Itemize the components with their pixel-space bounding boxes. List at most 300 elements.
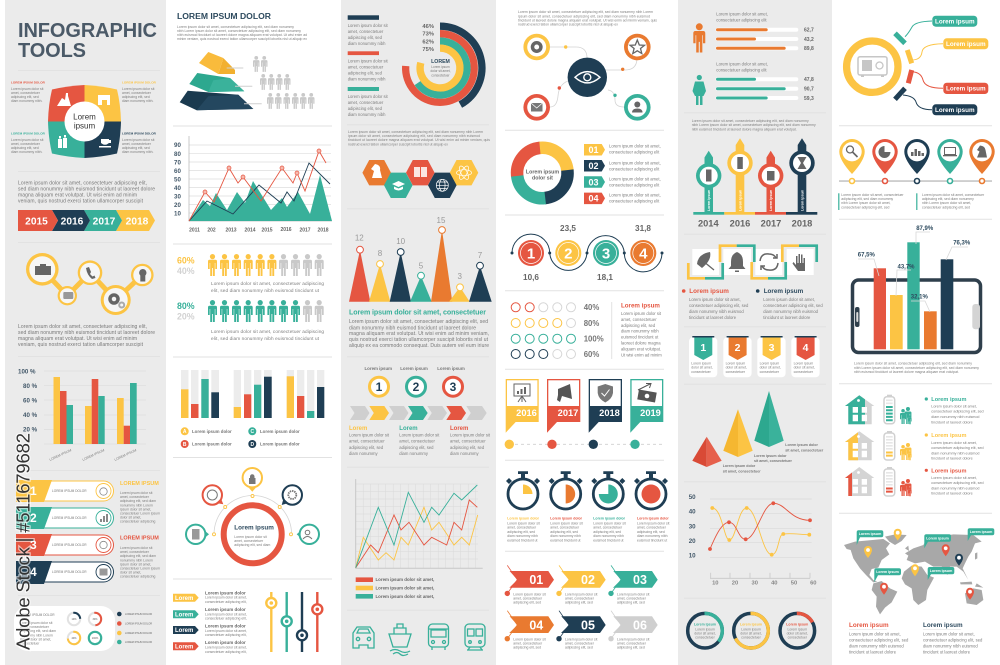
- year flags: [506, 379, 663, 433]
- numbered tags: Lorem ipsum dolor sit amet,: [609, 160, 661, 165]
- winding number circles: 18,1: [597, 273, 613, 282]
- arrow 02: Lorem ipsum dolor sit: [565, 592, 597, 596]
- text block: Lorem ipsum dolor sit amet, consectetuer adipiscing elit,: [18, 324, 147, 330]
- card 2: consectetuer: [726, 370, 746, 374]
- bar chart: LOREM IPSUM: [82, 448, 105, 462]
- numbered tags: Lorem ipsum dolor sit amet,: [609, 143, 661, 148]
- icon: cup: [99, 139, 111, 148]
- radial bar chart: 75%: [422, 47, 434, 53]
- icon: eye: [575, 72, 600, 83]
- three donuts: consectetuer: [788, 636, 808, 640]
- numbered tags: consectetuer adipiscing elit: [609, 182, 660, 187]
- step text: diam nonummy: [349, 451, 379, 456]
- stopwatches: adipiscing elit, sed: [637, 530, 665, 534]
- label bottom right: diam nonummy nibh.: [122, 150, 154, 154]
- icon: shop: [98, 95, 110, 105]
- phone bar chart: 76,3%: [953, 241, 971, 247]
- card with small donuts: consectetuer: [20, 642, 40, 646]
- arrow 04: [505, 611, 554, 650]
- label bottom right: Lorem ipsum dolor sit: [122, 138, 154, 142]
- grouped bars: [181, 370, 324, 418]
- arrow 01: Lorem ipsum dolor sit: [513, 592, 546, 596]
- text block: [692, 119, 816, 131]
- legend bars with text: amet, consectetuer: [348, 29, 384, 34]
- circular four-part diagram: Lorem: [73, 112, 96, 121]
- stopwatches: Lorem ipsum dolor sit: [550, 522, 583, 526]
- stopwatches: amet, consectetuer: [637, 526, 667, 530]
- family teal: [900, 407, 912, 424]
- card 3: dolor sit amet,: [760, 366, 781, 370]
- icon: car: [353, 627, 374, 648]
- numbered circles: 3: [450, 380, 457, 394]
- two-column text: diam nonummy nibh euismod: [689, 309, 744, 314]
- small legend: LOREM IPSUM DOLOR: [125, 622, 152, 626]
- triangle value chart: 8: [378, 249, 383, 258]
- arrow 01: 01: [529, 573, 543, 587]
- card with small donuts: 30%: [92, 618, 98, 621]
- triangle value chart: 3: [457, 272, 462, 281]
- card with small donuts: adipiscing elit, sed diam: [20, 629, 56, 633]
- curve line chart: 20: [732, 580, 738, 586]
- two-column text: consectetuer adipiscing elit, sed: [763, 303, 823, 308]
- eye network: [523, 34, 651, 121]
- side text 2: consectetuer Lorem ipsum: [120, 566, 160, 570]
- side text 2: ipsum dolor sit amet,: [120, 562, 151, 566]
- pictogram 80 percent: [177, 300, 324, 341]
- panel: column 3 background: [341, 0, 496, 665]
- gender bars male: 62,7: [804, 28, 814, 34]
- bar chart: 40 %: [23, 412, 38, 419]
- card with small donuts: [14, 606, 115, 651]
- stopwatches: euismod tincidunt ut: [507, 538, 538, 542]
- timeline dots: [505, 440, 665, 449]
- bar chart: 20 %: [23, 426, 38, 434]
- label top left: adipiscing elit, sed: [11, 95, 39, 99]
- stopwatches: Lorem ipsum dolor sit: [507, 522, 540, 526]
- text block: Lorem ipsum dolor sit amet, consectetuer adipiscing elit,: [18, 180, 147, 186]
- line chart with mountains: 10: [174, 210, 181, 217]
- small legend: [117, 612, 152, 644]
- tag list: Lorem: [175, 644, 193, 650]
- segmented donut: dolor sit: [532, 176, 553, 182]
- pictogram 60 percent: 40%: [177, 266, 195, 276]
- bottom left text: tincidunt ut laoreet dolore: [849, 650, 897, 654]
- arrow 03: 03: [633, 573, 647, 587]
- step text: [349, 426, 491, 456]
- pin: magnifier: [839, 139, 865, 184]
- label bottom left: diam nonummy nibh.: [11, 150, 43, 154]
- label bottom right: amet, consectetuer: [122, 142, 152, 146]
- tag list: Lorem ipsum dolor: [205, 607, 246, 612]
- stopwatches: adipiscing elit, sed: [593, 530, 621, 534]
- paragraph: [349, 319, 489, 349]
- card 1: consectetuer: [691, 370, 712, 374]
- label top left: Lorem ipsum dolor sit: [11, 87, 43, 91]
- text block: magna aliquam erat volutpat. Ut wisi enim ad minim: [18, 192, 137, 198]
- house rows: [845, 395, 984, 496]
- numbered banner list: LOREM IPSUM DOLOR: [52, 516, 87, 520]
- icon: knight: [371, 164, 382, 178]
- winding number circles: 31,8: [635, 224, 651, 233]
- curve line chart: [689, 494, 817, 586]
- label top left: diam nonummy nibh.: [11, 99, 43, 103]
- year arrow banner: 2016: [61, 216, 84, 227]
- winding number circles: 2: [564, 246, 572, 262]
- dot rating rows: [511, 303, 604, 359]
- stopwatches: Lorem ipsum dolor: [550, 517, 583, 521]
- icon: bus: [428, 624, 448, 650]
- node: gear: [523, 34, 550, 60]
- world map: Lorem ipsum: [859, 532, 881, 536]
- label top left: LOREM IPSUM DOLOR: [11, 80, 46, 84]
- gender bars female: consectetuer adipiscing elit: [716, 68, 767, 72]
- three donuts: Lorem ipsum: [741, 628, 761, 632]
- map pins on line: [839, 139, 995, 184]
- flag 2016: [506, 379, 539, 433]
- numbered banner list: LOREM IPSUM DOLOR: [52, 543, 87, 547]
- tag list: Lorem ipsum dolor: [205, 590, 246, 595]
- label bottom right: adipiscing elit, sed: [122, 146, 150, 150]
- icon: hand: [792, 254, 805, 271]
- pictogram 80 percent: Lorem ipsum dolor sit amet, consectetuer adipiscing: [211, 329, 324, 334]
- intro text: nibh euismod tincidunt ut laoreet dolore magna aliquam erat volutpat. Ut wisi enim ad: [177, 33, 307, 37]
- text block: magna aliquam erat volutpat. Ut wisi enim ad minim: [18, 336, 137, 342]
- text block: ipsum dolor sit amet, consectetuer adipiscing elit, sed diam nonummy nibh euismod: [348, 134, 480, 138]
- arrow 04: 04: [529, 618, 543, 632]
- two-column text: Lorem ipsum dolor sit amet,: [689, 297, 741, 302]
- tag list: Lorem ipsum dolor sit amet,: [205, 646, 247, 650]
- intro text column 4: Lorem ipsum dolor sit amet, consectetuer adipiscing elit, sed diam nonummy nibh Lorem: [518, 10, 653, 14]
- transport icons: [353, 624, 485, 656]
- family yellow: [900, 443, 912, 460]
- text block: tincidunt ut laoreet dolore magna aliquam erat volutpat. Ut wisi enim ad minim veniam, quis: [348, 138, 490, 142]
- card with small donuts: LOREM IPSUM DOLOR: [20, 613, 55, 617]
- house text 2: diam nonummy nibh euismod: [931, 451, 979, 455]
- three donuts: dolor sit amet,: [694, 632, 716, 636]
- flag 2019: [630, 379, 663, 433]
- radial bar chart: Lorem ipsum: [431, 65, 450, 69]
- numbered tags: consectetuer adipiscing elit: [609, 166, 660, 171]
- legend A B C D: Lorem ipsum dolor: [260, 442, 300, 446]
- numbered circles: Lorem ipsum: [400, 366, 428, 371]
- side text 2: dolor sit amet,: [120, 571, 141, 575]
- gender bars male: 43,2: [804, 37, 814, 43]
- label top right: diam nonummy nibh.: [122, 99, 154, 103]
- hexagon cluster: [362, 160, 478, 198]
- icon: globe: [436, 179, 448, 191]
- arrow 01: amet, consectetuer: [513, 596, 543, 600]
- arrow towers: 2017: [761, 219, 781, 229]
- step text: amet, consectetuer: [349, 439, 385, 444]
- arrow 05: [556, 611, 606, 650]
- legend A B C D: Lorem ipsum dolor: [260, 429, 300, 434]
- step text: diam nonummy: [399, 451, 429, 456]
- step text: adipiscing elit, sed: [399, 445, 434, 450]
- intro text: Lorem ipsum dolor sit amet, consectetuer adipiscing elit, sed diam nonummy: [177, 25, 294, 29]
- line chart with mountains: 90: [174, 142, 181, 149]
- curve line chart: 20: [689, 538, 696, 545]
- numbered banner list: [16, 480, 114, 584]
- numbered circles: [365, 366, 465, 396]
- gender bars female: Lorem ipsum dolor sit amet,: [716, 62, 768, 66]
- bottom right text: [923, 622, 983, 654]
- side text 1: dolor sit amet,: [120, 516, 141, 520]
- teal heading: Lorem ipsum dolor sit amet, consectetuer: [349, 308, 486, 316]
- text block: [18, 180, 155, 204]
- pin: laptop: [937, 139, 963, 184]
- text block: sed diam nonummy nibh euismod tincidunt ut laoreet dolore: [18, 330, 155, 336]
- intro text column 4: nostrud exerci tation ullamcorper suscipit lobortis nisl ut aliquip ex: [518, 22, 618, 26]
- gender bars male: 89,8: [804, 46, 814, 52]
- winding number circles: 23,5: [560, 224, 576, 233]
- triangle value chart: 5: [419, 262, 424, 270]
- card 1: dolor sit amet,: [691, 366, 713, 370]
- rating text: euismod tincidunt ut: [621, 335, 659, 340]
- grid line chart: [356, 479, 483, 568]
- three donuts: consectetuer: [695, 636, 716, 640]
- card 4: 4: [803, 342, 809, 354]
- arrow 02: [556, 565, 606, 605]
- curve line chart: 10: [689, 553, 696, 560]
- curve line chart: 50: [791, 580, 797, 586]
- tower 2018: Lorem ipsum: [800, 190, 804, 211]
- safe ring with callouts: Lorem ipsum: [946, 41, 986, 48]
- step text: Lorem ipsum dolor sit: [450, 433, 491, 438]
- line chart with mountains: 2018: [317, 228, 329, 234]
- legend A B C D: [181, 427, 300, 448]
- bar chart: 80 %: [23, 383, 38, 390]
- house text 3: tincidunt ut laoreet dolore: [931, 492, 973, 496]
- arrow 03: [608, 565, 658, 605]
- stopwatches: Lorem ipsum dolor sit: [593, 522, 626, 526]
- legend A B C D: Lorem ipsum dolor: [192, 429, 232, 434]
- arrow 06: amet, consectetuer: [617, 642, 647, 646]
- two-column text: [682, 288, 823, 320]
- tag list: Lorem ipsum dolor sit amet,: [205, 596, 247, 600]
- numbered circles: 2: [413, 380, 420, 394]
- segmented donut: Lorem ipsum: [526, 170, 559, 176]
- phone bar chart: [852, 226, 980, 352]
- flag 2017: [547, 379, 580, 433]
- icon: atom: [456, 165, 472, 181]
- rating text: laoreet dolore magna: [621, 340, 661, 346]
- arrow 04: Lorem ipsum dolor sit: [513, 637, 546, 641]
- card 1: Lorem ipsum: [691, 362, 711, 366]
- icon: refresh arrows: [760, 254, 778, 270]
- legend bars with text: [348, 15, 389, 117]
- icon: book: [414, 167, 427, 177]
- house teal: [845, 395, 874, 424]
- legend bars with text: Lorem ipsum dolor sit: [348, 59, 389, 64]
- stopwatches: amet, consectetuer: [593, 526, 623, 530]
- three donuts: Lorem ipsum: [740, 622, 762, 626]
- bottom left text: consectetuer adipiscing elit, sed: [849, 638, 909, 642]
- side text 2: [120, 535, 160, 579]
- arrow 06: [608, 611, 658, 650]
- house text 1: consectetuer adipiscing elit, sed: [931, 410, 984, 414]
- bottom right text: tincidunt ut laoreet dolore: [923, 650, 971, 654]
- side text 1: nonummy nibh Lorem: [120, 503, 153, 507]
- line chart with mountains: [174, 136, 332, 234]
- radial bar chart: 73%: [422, 32, 434, 38]
- stopwatches: diam nonummy nibh: [637, 534, 668, 538]
- stopwatch 1: [506, 471, 540, 509]
- title: INFOGRAPHIC: [18, 20, 157, 42]
- card with small donuts: amet, consectetuer: [20, 625, 50, 629]
- radial diagram with pins: Lorem ipsum: [234, 524, 274, 532]
- numbered tags: Lorem ipsum dolor sit amet,: [609, 176, 661, 181]
- triangle value chart: 10: [396, 237, 406, 246]
- safe ring with callouts: Lorem ipsum: [935, 107, 975, 114]
- three donuts: consectetuer: [741, 636, 762, 640]
- text block: Lorem ipsum dolor sit amet, consectetuer adipiscing elit, sed diam nonummy nibh Lorem: [348, 130, 483, 134]
- flag 2017: 2017: [558, 408, 578, 418]
- chain of circles with icons: [26, 253, 154, 315]
- text block: veniam, quis nostrud exerci tation ullamcorper suscipit: [18, 198, 144, 204]
- side text 2: nonummy nibh Lorem: [120, 558, 153, 562]
- two-column text: tincidunt ut laoreet dolore: [763, 315, 811, 320]
- stopwatch 3: [591, 471, 625, 509]
- tag list: [173, 590, 247, 654]
- small legend: LOREM IPSUM DOLOR: [125, 641, 152, 644]
- card with small donuts: 100%: [92, 637, 99, 640]
- label top right: amet, consectetuer: [122, 91, 152, 95]
- winding number circles: [510, 224, 664, 282]
- card 2: dolor sit amet,: [726, 366, 747, 370]
- house text 3: Lorem ipsum dolor sit amet,: [931, 476, 977, 480]
- arrow towers: 2014: [698, 219, 719, 229]
- house text 1: diam nonummy nibh euismod: [931, 415, 979, 419]
- stopwatches: euismod tincidunt ut: [593, 538, 624, 542]
- label bottom left: [11, 132, 46, 154]
- text block: nibh Lorem ipsum dolor sit amet, consectetuer adipiscing elit, sed diam nonummy: [854, 366, 979, 370]
- house text 2: [925, 433, 984, 461]
- dot rating rows: 60%: [584, 350, 599, 359]
- three donuts: Lorem ipsum: [694, 622, 716, 626]
- bottom left text: diam nonummy nibh euismod: [849, 644, 904, 648]
- bottom left text: Lorem ipsum: [849, 622, 889, 629]
- triangle value chart: 7: [478, 251, 483, 260]
- triangle value chart: [349, 216, 492, 302]
- intro text: minim veniam, quis nostrud exerci tation ullamcorper suscipit lobortis nisl ut aliquip ex: [177, 37, 307, 41]
- stopwatches: diam nonummy nibh: [593, 534, 624, 538]
- phone bar chart: 43,7%: [897, 265, 915, 271]
- world map: Lorem ipsum: [926, 536, 949, 540]
- step text: amet, consectetuer: [450, 439, 486, 444]
- numbered banner list: 4: [30, 565, 37, 579]
- tag list: Lorem: [175, 612, 193, 618]
- triangle value chart: 12: [355, 234, 364, 242]
- label top left: amet, consectetuer: [11, 91, 41, 95]
- radial bar chart: [406, 24, 482, 105]
- flag 2019: 2019: [640, 408, 661, 418]
- tag list: Lorem ipsum dolor sit amet,: [205, 629, 247, 633]
- tag list: Lorem: [175, 596, 193, 602]
- rating text: adipiscing elit, sed: [621, 323, 656, 328]
- icon: people: [58, 135, 67, 148]
- year arrow banner: 2018: [126, 216, 149, 227]
- stopwatches: adipiscing elit, sed: [507, 530, 535, 534]
- icon: safe: [858, 57, 887, 77]
- circular four-part diagram: ipsum: [74, 122, 96, 131]
- side text 2: amet, consectetuer: [120, 550, 150, 554]
- numbered tags: consectetuer adipiscing elit: [609, 149, 660, 154]
- tag list: Lorem ipsum dolor: [205, 640, 246, 645]
- line chart with mountains: 40: [174, 185, 181, 192]
- numbered circles: Lorem ipsum: [365, 366, 392, 371]
- tower 2014: Lorem ipsum: [707, 190, 711, 211]
- gender bars female: 59,3: [804, 96, 814, 102]
- gender bars female: 47,8: [804, 77, 814, 83]
- stopwatches: [506, 471, 669, 542]
- house text 2: Lorem ipsum dolor sit amet,: [931, 441, 977, 445]
- legend A B C D: A: [183, 429, 187, 435]
- paragraph: diam nonummy nibh euismod tincidunt ut laoreet dolore: [349, 325, 476, 331]
- flag 2018: 2018: [599, 408, 620, 418]
- heading column 2: LOREM IPSUM DOLOR: [177, 11, 272, 21]
- 3D pyramids: Lorem ipsum dolor: [723, 464, 756, 468]
- step text: adipiscing elit, sed: [450, 445, 485, 450]
- pictogram 60 percent: Lorem ipsum dolor sit amet, consectetuer adipiscing: [211, 281, 324, 286]
- house text 3: Lorem ipsum: [931, 468, 966, 474]
- card 4: dolor sit amet,: [794, 366, 815, 370]
- arrow 06: adipiscing elit, sed: [617, 646, 645, 650]
- line chart with mountains: 60: [174, 168, 181, 175]
- year arrow banner: 2017: [93, 216, 116, 227]
- radial bar chart: LOREM: [431, 59, 450, 65]
- node: star: [624, 34, 651, 60]
- chart legend: Lorem ipsum dolor sit amet,: [376, 586, 434, 590]
- text block: Lorem ipsum dolor sit amet, consectetuer adipiscing elit, sed diam nonummy: [692, 119, 809, 123]
- tag list: consectetuer adipiscing elit,: [205, 633, 247, 637]
- numbered banner list: 1: [30, 484, 37, 498]
- card 4: [791, 336, 820, 377]
- three donuts: dolor sit amet,: [740, 632, 762, 636]
- stopwatches: euismod tincidunt ut: [637, 538, 667, 542]
- gender bars female: [692, 62, 814, 105]
- intro text: nibh Lorem ipsum dolor sit amet, consectetuer adipiscing elit, sed diam nonummy: [177, 29, 301, 33]
- radial bar chart: 46%: [422, 24, 434, 30]
- legend bars with text: adipiscing elit, sed: [348, 35, 383, 40]
- intro text column 4: tincidunt ut laoreet dolore magna aliquam erat volutpat. Ut wisi enim ad minim veniam, quis: [518, 18, 657, 22]
- line chart with mountains: 2013: [225, 228, 237, 234]
- gender bars male: Lorem ipsum dolor sit amet,: [716, 12, 768, 16]
- gender bars male: [693, 12, 814, 53]
- card 3: consectetuer: [760, 370, 780, 374]
- paragraph: quis nostrud exerci tation ullamcorper suscipit lobortis nisl ut: [349, 337, 489, 343]
- pin: left lower: [186, 525, 209, 544]
- house text 1: [925, 397, 984, 424]
- intro text: [177, 25, 307, 41]
- step text: amet, consectetuer: [399, 439, 436, 444]
- flag 2018: [589, 379, 622, 433]
- arrow 02: amet, consectetuer: [565, 596, 595, 600]
- 3D pyramids: Lorem ipsum dolor: [754, 454, 787, 458]
- tag list: Lorem: [175, 628, 193, 634]
- three donuts: Lorem ipsum: [787, 628, 807, 632]
- bar chart: 100 %: [18, 368, 36, 376]
- line chart with mountains: 2016: [280, 227, 292, 233]
- card with small donuts: 40%: [71, 637, 77, 640]
- legend A B C D: Lorem ipsum dolor: [192, 442, 232, 446]
- legend bars with text: diam nonummy nibh: [348, 112, 386, 117]
- arrow 01: adipiscing elit, sed: [513, 601, 541, 605]
- icon: gears: [110, 295, 124, 308]
- side text 2: Lorem ipsum dolor sit: [120, 546, 152, 550]
- icon: ship: [389, 624, 411, 656]
- phone bar chart: 67,5%: [858, 252, 875, 258]
- two-column text: consectetuer adipiscing elit, sed: [689, 303, 749, 308]
